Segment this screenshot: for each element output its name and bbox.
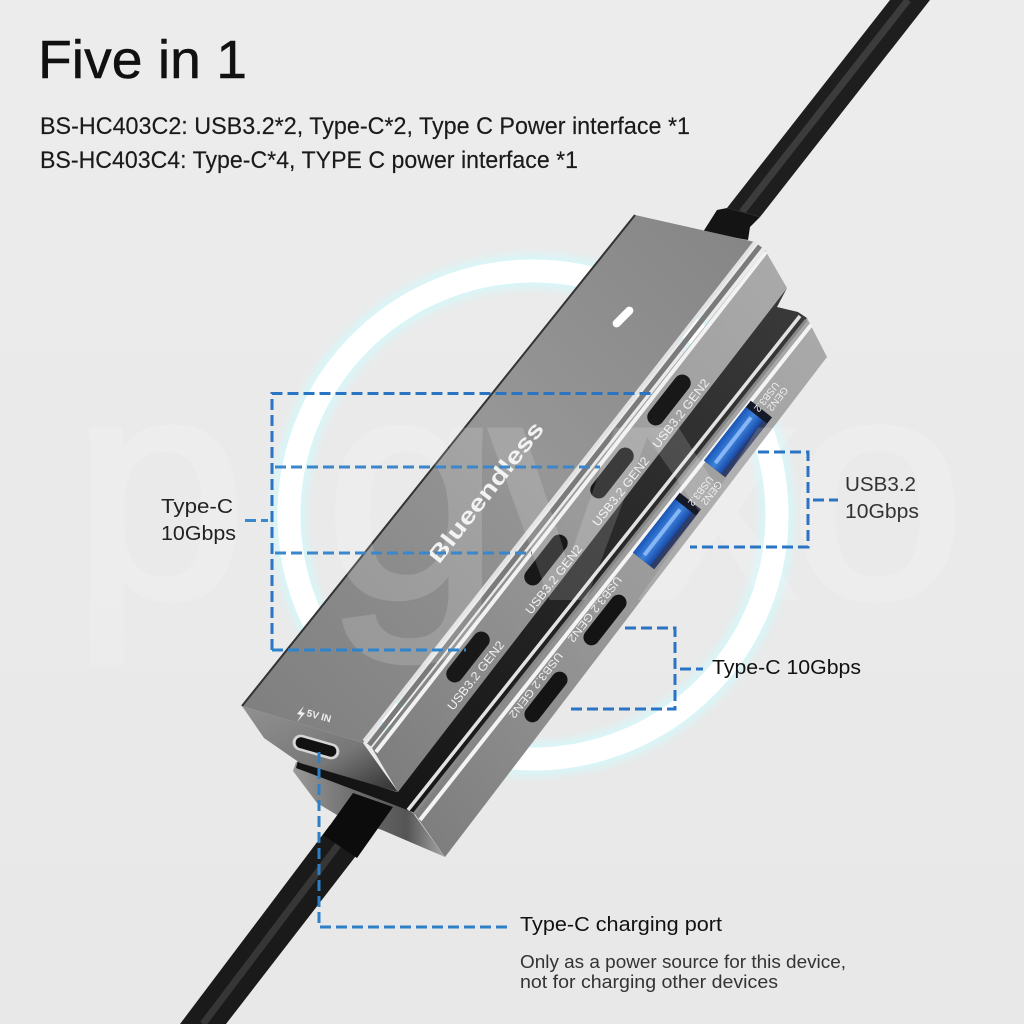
charging note: not for charging other devices [520, 972, 778, 992]
label: Type-C 10Gbps right: Type-C 10Gbps [712, 656, 861, 679]
label: Type-C 10Gbps left: 10Gbps [161, 522, 236, 545]
upper unit ridges [364, 242, 766, 752]
lower unit ridges [408, 316, 811, 820]
label: USB3.2 10Gbps: 10Gbps [845, 500, 919, 523]
callout lines: lower Type-C [571, 628, 703, 709]
charging note: Only as a power source for this device, [520, 952, 846, 972]
watermark: o [790, 312, 965, 664]
watermark: p [72, 312, 247, 666]
lower Type-C port 1 [580, 591, 630, 649]
model description [40, 113, 690, 174]
dark gap [296, 288, 807, 815]
lower port labels: USB3.2 GEN2 [506, 650, 565, 720]
callout line: charging port [319, 752, 510, 927]
label: USB3.2 10Gbps [845, 473, 919, 523]
upper unit side face [372, 250, 787, 792]
label: USB3.2 10Gbps: USB3.2 [845, 473, 916, 496]
lower Type-C port 2 [521, 668, 571, 726]
LED indicator [611, 305, 635, 329]
cable: lower [180, 793, 393, 1024]
upper port labels: USB3.2 GEN2 [522, 542, 585, 617]
lower port labels: USB3.2 GEN2 [565, 574, 624, 644]
glowing ring [289, 271, 777, 759]
callout lines: upper Type-C [245, 394, 653, 650]
model description: BS-HC403C4: Type-C*4, TYPE C power interface *1 [40, 147, 578, 174]
callout lines: USB3.2 [690, 452, 838, 547]
Type-C port 1 [443, 628, 493, 686]
model description: BS-HC403C2: USB3.2*2, Type-C*2, Type C Power interface *1 [40, 113, 690, 140]
brand name: Blueendless [423, 416, 549, 568]
USB-A port labels: USB3.2 [685, 474, 715, 508]
upper port labels: USB3.2 GEN2 [589, 454, 652, 529]
cable: upper [703, 0, 930, 240]
upper port labels: USB3.2 GEN2 [649, 376, 712, 451]
upper unit top edge [242, 215, 635, 706]
5V IN label: 5V IN [305, 708, 332, 725]
USB-A port right [704, 401, 772, 477]
hub: lower unit [293, 288, 827, 857]
USB-A port left [633, 493, 701, 569]
watermark: x [640, 312, 798, 664]
Type-C port 3 [587, 444, 637, 502]
USB-A port labels: GEN2 [698, 478, 724, 507]
upper port labels: USB3.2 GEN2 [444, 638, 507, 713]
title: Five in 1 [38, 30, 247, 90]
upper port labels [444, 376, 712, 713]
USB-A port labels: GEN2 [764, 384, 790, 413]
watermark: g [325, 312, 500, 666]
hub: upper unit [242, 215, 787, 792]
USB-A port labels: USB3.2 [751, 380, 781, 414]
watermark: v [490, 312, 648, 664]
upper unit top face [242, 215, 755, 743]
Type-C port 2 [521, 531, 571, 589]
power port [291, 733, 341, 761]
label: charging port: Type-C charging port [520, 913, 722, 936]
lower port labels [506, 574, 624, 720]
charging note [520, 952, 846, 992]
lower unit side face [414, 318, 827, 857]
watermark [72, 312, 965, 666]
label: Type-C 10Gbps left [161, 495, 236, 545]
Type-C port 4 [644, 371, 694, 429]
label: Type-C 10Gbps left: Type-C [161, 495, 233, 518]
icon: bolt [297, 706, 305, 722]
USB-A port labels [685, 380, 790, 508]
lower unit end face [293, 762, 445, 857]
upper unit end face [242, 706, 398, 792]
